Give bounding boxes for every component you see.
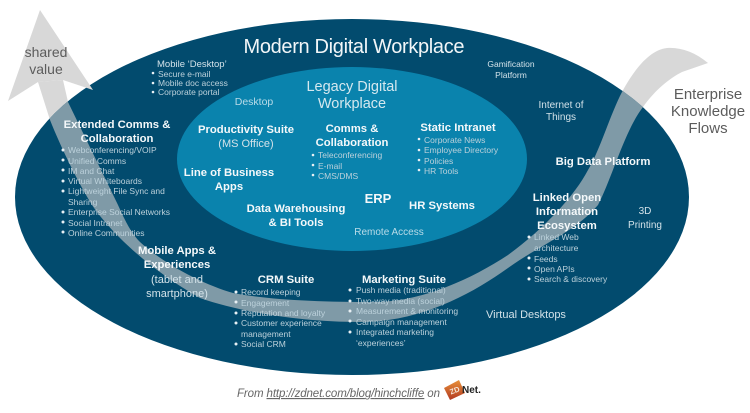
block: marketing suite bbox=[348, 274, 458, 348]
block: productivity suite: (MS Office) bbox=[218, 138, 274, 150]
block: CRM suite: Record keeping bbox=[241, 287, 301, 297]
block: linked open information ecosystem: Open APIs bbox=[534, 264, 575, 274]
label: ERP: ERP bbox=[365, 191, 392, 206]
block: line of business apps: Line of Business bbox=[184, 167, 274, 179]
block: linked open information ecosystem: architecture bbox=[534, 243, 579, 253]
icon: ZDNet logo: ZD bbox=[448, 384, 462, 397]
block: static intranet bbox=[418, 122, 499, 176]
label: shared value bbox=[25, 44, 67, 77]
block: mobile desktop: Secure e-mail bbox=[158, 69, 211, 79]
label: 3D printing: 3D bbox=[639, 206, 651, 217]
block: linked open information ecosystem: Information bbox=[536, 206, 598, 218]
block: static intranet: Corporate News bbox=[424, 135, 485, 145]
block: extended comms: Enterprise Social Networks bbox=[68, 207, 170, 217]
heading: legacy digital workplace: Legacy Digital bbox=[306, 79, 398, 95]
label: enterprise knowledge flows bbox=[671, 86, 745, 137]
block: mobile desktop bbox=[152, 59, 228, 97]
block: mobile apps: (tablet and bbox=[151, 274, 203, 286]
icon: ZDNet logo bbox=[444, 380, 481, 400]
panel: legacy digital workplace ellipse bbox=[177, 67, 527, 251]
label: shared value: shared bbox=[25, 44, 67, 60]
block: data warehousing: & BI Tools bbox=[268, 217, 324, 229]
block: CRM suite: CRM Suite bbox=[258, 274, 314, 286]
label: internet of things: Internet of bbox=[538, 100, 584, 111]
block: line of business apps: Apps bbox=[215, 181, 243, 193]
block: extended comms: Webconferencing/VOIP bbox=[68, 145, 157, 155]
block: line of business apps bbox=[184, 167, 274, 193]
label: big data platform: Big Data Platform bbox=[556, 156, 650, 168]
label: desktop: Desktop bbox=[235, 96, 273, 108]
block: extended comms: Extended Comms & bbox=[64, 119, 170, 131]
heading: legacy digital workplace: Workplace bbox=[318, 96, 386, 112]
block: extended comms: Unified Comms bbox=[68, 156, 126, 166]
label: enterprise knowledge flows: Enterprise bbox=[674, 86, 742, 103]
block: linked open information ecosystem: Feeds bbox=[534, 254, 558, 264]
block: linked open information ecosystem: Ecosystem bbox=[537, 220, 597, 232]
label: enterprise knowledge flows: Flows bbox=[688, 120, 728, 137]
block: CRM suite: Social CRM bbox=[241, 339, 286, 349]
background flow arrow bbox=[38, 48, 708, 322]
icon: ZDNet logo: Net. bbox=[462, 385, 481, 396]
label: remote access: Remote Access bbox=[354, 227, 424, 238]
block: mobile apps: Experiences bbox=[144, 259, 210, 271]
block: marketing suite: Campaign management bbox=[356, 317, 447, 327]
block: comms and collaboration: Collaboration bbox=[316, 137, 388, 149]
block: static intranet: Employee Directory bbox=[424, 145, 499, 155]
label: 3D printing: Printing bbox=[628, 220, 662, 231]
block: CRM suite bbox=[234, 274, 326, 349]
block: comms and collaboration: Comms & bbox=[326, 123, 378, 135]
block: comms and collaboration: Teleconferencing bbox=[318, 150, 383, 160]
block: linked open information ecosystem: Search & discovery bbox=[534, 274, 608, 284]
block: marketing suite: Integrated marketing bbox=[356, 327, 434, 337]
block: productivity suite: Productivity Suite bbox=[198, 124, 294, 136]
block: mobile apps bbox=[138, 245, 216, 300]
block: extended comms: Lightweight File Sync and bbox=[68, 186, 165, 196]
block: extended comms: Virtual Whiteboards bbox=[68, 176, 142, 186]
source credit: From http://zdnet.com/blog/hinchcliffe on bbox=[237, 388, 440, 400]
block: extended comms bbox=[62, 119, 170, 238]
heading: legacy digital workplace bbox=[306, 79, 398, 112]
block: static intranet: Policies bbox=[424, 156, 453, 166]
block: static intranet: Static Intranet bbox=[420, 122, 496, 134]
block: marketing suite: Push media (traditional) bbox=[356, 285, 446, 295]
block: mobile desktop: Mobile ‘Desktop’ bbox=[157, 59, 227, 70]
block: extended comms: Collaboration bbox=[81, 133, 153, 145]
block: comms and collaboration bbox=[312, 123, 388, 181]
block: mobile desktop: Corporate portal bbox=[158, 87, 220, 97]
block: productivity suite bbox=[198, 124, 294, 150]
block: data warehousing: Data Warehousing bbox=[247, 203, 345, 215]
block: linked open information ecosystem: Linked Web bbox=[534, 232, 579, 242]
block: marketing suite: ‘experiences’ bbox=[356, 338, 406, 348]
block: mobile desktop: Mobile doc access bbox=[158, 78, 228, 88]
block: mobile apps: Mobile Apps & bbox=[138, 245, 216, 257]
block: data warehousing bbox=[247, 203, 345, 229]
block: static intranet: HR Tools bbox=[424, 166, 458, 176]
label: HR systems: HR Systems bbox=[409, 200, 475, 212]
block: linked open information ecosystem bbox=[528, 192, 608, 284]
label: internet of things bbox=[538, 100, 584, 123]
block: extended comms: IM and Chat bbox=[68, 166, 115, 176]
block: CRM suite: management bbox=[241, 329, 291, 339]
block: marketing suite: Two-way media (social) bbox=[356, 296, 445, 306]
block: mobile apps: smartphone) bbox=[146, 288, 208, 300]
block: CRM suite: Reputation and loyalty bbox=[241, 308, 326, 318]
panel: modern digital workplace ellipse bbox=[15, 19, 689, 375]
block: extended comms: Online Communities bbox=[68, 228, 145, 238]
block: CRM suite: Customer experience bbox=[241, 318, 322, 328]
label: gamification platform bbox=[487, 59, 535, 80]
label: internet of things: Things bbox=[546, 112, 576, 123]
label: 3D printing bbox=[628, 206, 662, 231]
block: marketing suite: Measurement & monitoring bbox=[356, 306, 458, 316]
flow band inside ellipse bbox=[50, 91, 643, 322]
label: enterprise knowledge flows: Knowledge bbox=[671, 103, 745, 120]
block: extended comms: Social Intranet bbox=[68, 218, 123, 228]
block: marketing suite: Marketing Suite bbox=[362, 274, 446, 286]
block: linked open information ecosystem: Linked Open bbox=[533, 192, 601, 204]
block: comms and collaboration: E-mail bbox=[318, 161, 342, 171]
label: virtual desktops: Virtual Desktops bbox=[486, 309, 566, 321]
block: extended comms: Sharing bbox=[68, 197, 98, 207]
label: shared value: value bbox=[29, 61, 63, 77]
label: gamification platform: Gamification bbox=[487, 59, 535, 69]
block: comms and collaboration: CMS/DMS bbox=[318, 171, 358, 181]
arrow head: shared value bbox=[8, 10, 93, 101]
block: CRM suite: Engagement bbox=[241, 298, 290, 308]
title: Modern Digital Workplace bbox=[244, 36, 464, 58]
label: gamification platform: Platform bbox=[495, 70, 527, 80]
